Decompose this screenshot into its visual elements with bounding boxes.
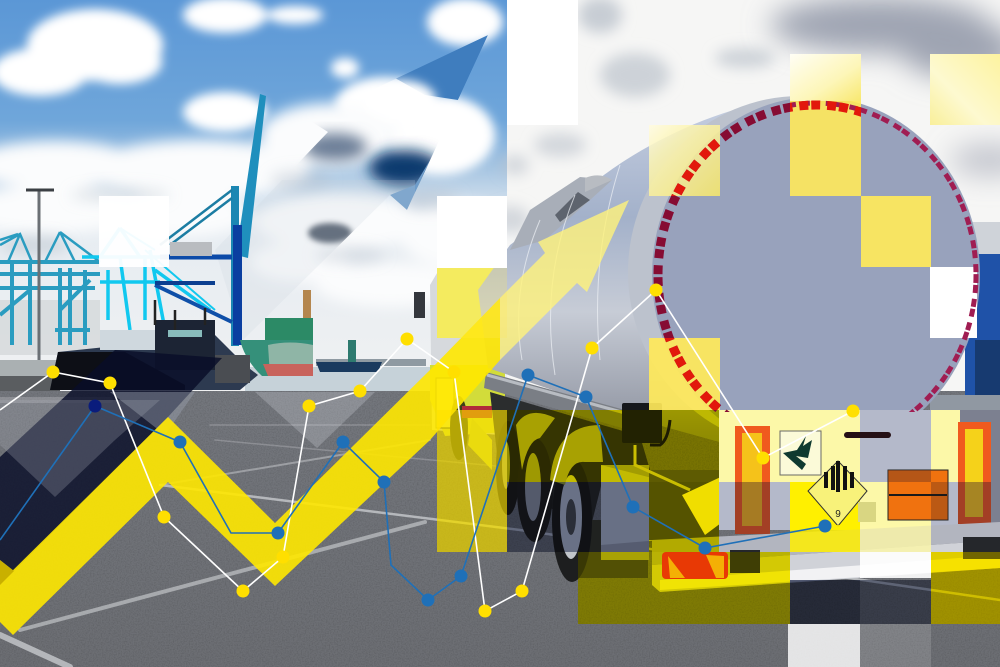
rear panel bbox=[719, 410, 1000, 534]
crane boom bbox=[155, 94, 266, 346]
tanker body bbox=[478, 95, 980, 453]
blue building behind tanker bbox=[930, 222, 1000, 411]
junction box bbox=[622, 403, 662, 443]
truck cab bbox=[414, 268, 505, 470]
clouds bbox=[0, 0, 1000, 307]
multiply yellow squares bbox=[437, 410, 1000, 624]
tug boats bbox=[50, 300, 258, 390]
left reflective plate bbox=[735, 426, 770, 534]
wheel 1 bbox=[496, 421, 520, 515]
dashed red ring bbox=[656, 103, 976, 447]
icon: lamp post bbox=[26, 190, 54, 360]
orange placard bbox=[888, 470, 948, 520]
tail light bbox=[662, 552, 728, 579]
mudflap bbox=[578, 520, 648, 578]
hazard label: environment bbox=[780, 431, 821, 475]
latch bbox=[858, 502, 876, 522]
port cranes bbox=[0, 94, 266, 360]
yellow zigzag arrow bbox=[0, 200, 629, 635]
dark zigzag band bbox=[0, 350, 375, 571]
hazard label: class 9 bbox=[808, 461, 867, 526]
wheel 3 bbox=[552, 458, 592, 582]
tank end disc bbox=[652, 97, 980, 453]
chassis and wheels bbox=[484, 372, 725, 582]
right reflective plate bbox=[958, 422, 991, 524]
dark squares bbox=[507, 482, 931, 624]
clearance light bbox=[844, 432, 891, 438]
tank end dome bbox=[628, 96, 972, 448]
asphalt ground bbox=[0, 391, 1000, 667]
fenders bbox=[516, 413, 555, 470]
cargo ship bbox=[240, 290, 313, 376]
blue line chart bbox=[0, 368, 832, 606]
hazard label: class 9: 9 bbox=[835, 509, 841, 520]
translucent yellow squares bbox=[437, 101, 931, 410]
olive lift on lower row bbox=[507, 410, 790, 624]
rear bumper bbox=[652, 522, 1000, 592]
rear socket bbox=[730, 550, 760, 573]
pale yellow squares bbox=[649, 54, 1000, 196]
bright yellow column bbox=[437, 410, 1000, 624]
wheel 2 bbox=[517, 438, 553, 542]
sky background bbox=[0, 0, 1000, 400]
white line chart bbox=[0, 284, 860, 618]
water and horizon bbox=[0, 340, 445, 392]
translucent sky arrow bbox=[240, 35, 488, 284]
